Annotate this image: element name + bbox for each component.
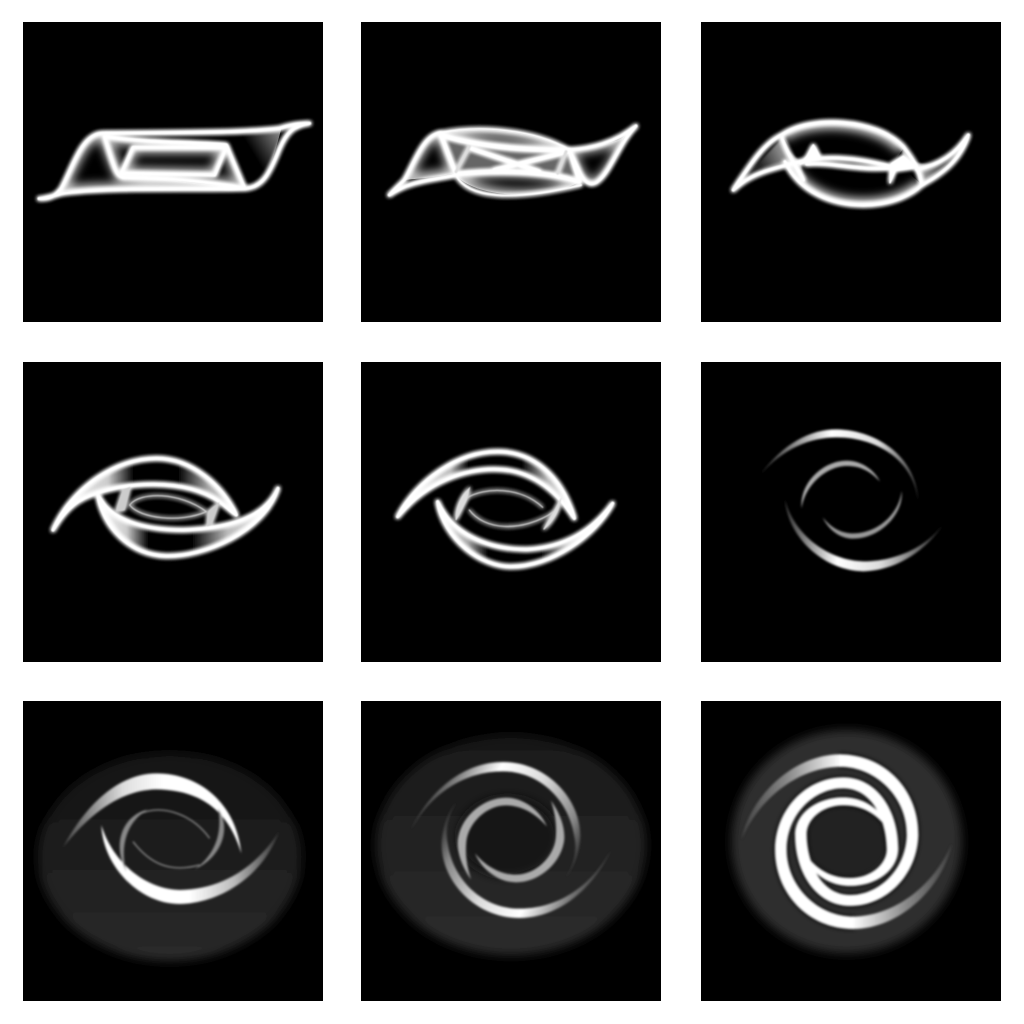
- dark core: [458, 797, 558, 877]
- halo: [376, 735, 646, 955]
- outline strokes: [39, 123, 310, 199]
- shape 6: [760, 429, 943, 571]
- inner glow fills: [61, 128, 281, 192]
- arcs: [411, 762, 611, 918]
- shape 9: [732, 730, 962, 953]
- dark shadow of spiral arms: [775, 754, 918, 929]
- crescent gradient fills: [53, 458, 278, 556]
- shape 5: [398, 452, 613, 567]
- outline strokes: [53, 458, 278, 556]
- crescent gradient fills: [398, 452, 613, 567]
- halo: [732, 730, 962, 953]
- shape 2: [389, 126, 636, 195]
- panel 7: thick crescents on a dim halo: [23, 701, 323, 1001]
- crescents: [63, 773, 279, 904]
- panel 9: bright closed spiral on a halo: [701, 701, 1001, 1001]
- outline strokes: [398, 452, 613, 567]
- shape 4: [53, 458, 278, 556]
- shape 3: [733, 122, 968, 205]
- panel 1: ribbon with nested rectangles: [23, 22, 323, 322]
- spiral arms: [742, 754, 952, 929]
- shape 8: [376, 735, 646, 955]
- halo: [38, 753, 301, 961]
- panel 3: leaf with barbed centre line: [701, 22, 1001, 322]
- centre hole: [807, 805, 887, 877]
- panel 2: ribbon with crossing lines: [361, 22, 661, 322]
- inner glow fills: [750, 122, 953, 205]
- shape 7: [38, 753, 301, 961]
- outline strokes: [733, 122, 968, 205]
- shape 1: [39, 123, 310, 199]
- panel 6: four thin arcs: [701, 362, 1001, 662]
- outline strokes: [389, 126, 636, 195]
- panel 8: spiral arcs on a dim halo: [361, 701, 661, 1001]
- panel 4: two crescents with inner eye: [23, 362, 323, 662]
- panel 5: separating crescents: [361, 362, 661, 662]
- inner glow fills: [404, 130, 624, 195]
